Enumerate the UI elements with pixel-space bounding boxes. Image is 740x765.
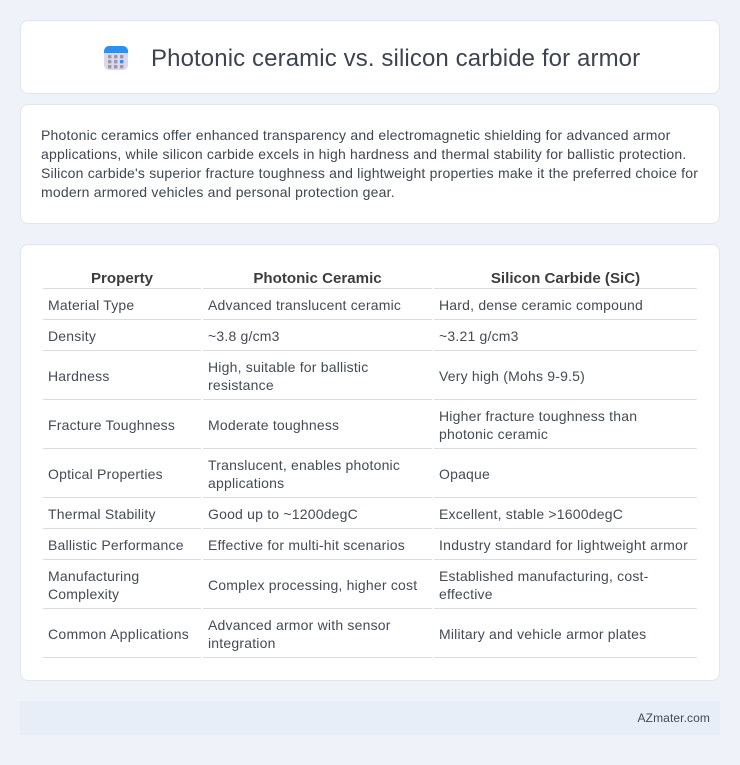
table header: Silicon Carbide (SiC) xyxy=(491,270,640,286)
row: common applications: Common Applications xyxy=(48,626,189,642)
row: common applications: Military and vehicle armor plates xyxy=(439,626,646,642)
intro text: Silicon carbide's superior fracture toughness and lightweight properties make it the preferred choice for xyxy=(41,165,698,181)
footer source text: AZmater.com xyxy=(638,711,710,725)
table header xyxy=(91,270,640,286)
row: fracture toughness: Higher fracture toughness than xyxy=(439,408,637,424)
intro card xyxy=(20,104,720,224)
row: ballistic performance xyxy=(48,537,688,553)
row: thermal stability: Good up to ~1200degC xyxy=(208,506,358,522)
row: thermal stability: Thermal Stability xyxy=(48,506,156,522)
row: fracture toughness: photonic ceramic xyxy=(439,426,548,442)
row: thermal stability xyxy=(48,506,623,522)
intro text: Photonic ceramics offer enhanced transparency and electromagnetic shielding for advanced armor xyxy=(41,127,670,143)
row: material type: Hard, dense ceramic compound xyxy=(439,297,643,313)
row: material type: Advanced translucent ceramic xyxy=(208,297,401,313)
comparison table xyxy=(43,270,697,658)
row: fracture toughness: Moderate toughness xyxy=(208,417,339,433)
row: common applications xyxy=(48,617,646,651)
row: density: ~3.21 g/cm3 xyxy=(439,328,519,344)
intro text: modern armored vehicles and personal protection gear. xyxy=(41,184,395,200)
row: density: ~3.8 g/cm3 xyxy=(208,328,280,344)
footer bar xyxy=(20,701,720,735)
comparison table panel xyxy=(20,244,720,681)
row: common applications: Advanced armor with sensor xyxy=(208,617,391,633)
row: manufacturing complexity: Established manufacturing, cost- xyxy=(439,568,649,584)
row: material type xyxy=(48,297,643,313)
row: optical properties: applications xyxy=(208,475,284,491)
row: optical properties: Opaque xyxy=(439,466,490,482)
intro text: applications, while silicon carbide excels in high hardness and thermal stability for ballistic protection. xyxy=(41,146,686,162)
table header: Property xyxy=(91,270,153,286)
row: hardness: resistance xyxy=(208,377,274,393)
header card xyxy=(20,20,720,94)
row: material type: Material Type xyxy=(48,297,134,313)
row: hardness: High, suitable for ballistic xyxy=(208,359,368,375)
row: optical properties: Optical Properties xyxy=(48,466,163,482)
row: density xyxy=(48,328,519,344)
row: hardness xyxy=(48,359,585,393)
row: ballistic performance: Ballistic Performance xyxy=(48,537,184,553)
row: manufacturing complexity: Complex processing, higher cost xyxy=(208,577,417,593)
row: manufacturing complexity: effective xyxy=(439,586,493,602)
title: Photonic ceramic vs. silicon carbide for armor xyxy=(151,45,640,72)
row: density: Density xyxy=(48,328,96,344)
icon: calendar xyxy=(104,46,128,70)
row: common applications: integration xyxy=(208,635,276,651)
intro text xyxy=(41,127,698,200)
row: manufacturing complexity xyxy=(48,568,649,602)
row: thermal stability: Excellent, stable >1600degC xyxy=(439,506,623,522)
row: optical properties: Translucent, enables photonic xyxy=(208,457,400,473)
row: ballistic performance: Industry standard for lightweight armor xyxy=(439,537,688,553)
row: hardness: Hardness xyxy=(48,368,110,384)
row: optical properties xyxy=(48,457,490,491)
row: hardness: Very high (Mohs 9-9.5) xyxy=(439,368,585,384)
row: fracture toughness xyxy=(48,408,637,442)
row: ballistic performance: Effective for multi-hit scenarios xyxy=(208,537,405,553)
row: manufacturing complexity: Manufacturing xyxy=(48,568,139,584)
table header: Photonic Ceramic xyxy=(253,270,382,286)
row: fracture toughness: Fracture Toughness xyxy=(48,417,175,433)
row: manufacturing complexity: Complexity xyxy=(48,586,119,602)
